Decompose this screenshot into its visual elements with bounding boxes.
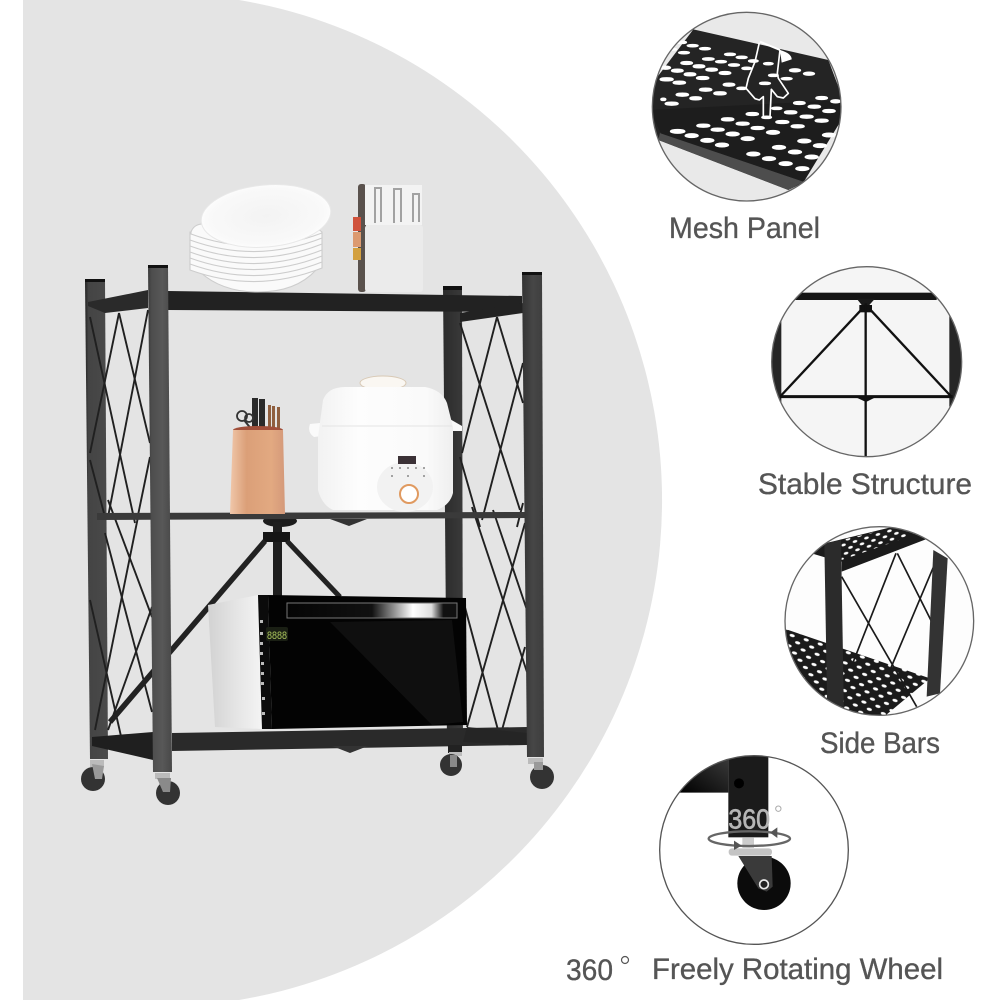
rotation arrows ring <box>709 827 790 850</box>
bottom shelf left wing <box>92 732 153 760</box>
microwave display <box>266 627 288 642</box>
front left post <box>148 266 172 772</box>
detail circle: side bars <box>783 525 977 720</box>
centre back folding brace <box>110 515 340 722</box>
knife block <box>353 184 423 292</box>
top bowl <box>199 179 333 253</box>
detail circle: stable structure <box>770 265 967 462</box>
wheel fork <box>729 837 772 856</box>
microwave button column <box>260 620 265 715</box>
microwave handle <box>287 603 457 618</box>
folding shelf rack <box>81 265 554 805</box>
label: 360 degrees: 360 <box>566 954 613 987</box>
detail circle: rotating wheel <box>657 753 853 950</box>
post caps <box>85 265 542 290</box>
microwave oven <box>208 595 467 729</box>
top shelf left wing <box>88 290 148 313</box>
microwave display: 8888 <box>267 630 287 642</box>
label: Stable Structure: Stable Structure <box>758 468 972 501</box>
rice cooker <box>309 376 462 512</box>
back right post <box>443 287 463 745</box>
plate stack <box>190 179 333 292</box>
top shelf <box>168 291 522 312</box>
pointing hand icon <box>746 42 792 117</box>
front right post <box>522 273 544 757</box>
utensil cup <box>230 398 285 514</box>
middle shelf bracket <box>330 519 367 526</box>
top shelf right wing <box>460 303 523 322</box>
caster wheel back left <box>81 760 105 791</box>
middle shelf <box>97 512 527 520</box>
label: Freely Rotating Wheel: Freely Rotating Wheel <box>652 953 943 986</box>
right side cross wires <box>460 317 527 730</box>
black wheel <box>737 857 791 910</box>
360 overlay text: 360 <box>728 803 770 834</box>
back left post <box>85 280 108 759</box>
detail circle: mesh panel <box>650 10 843 203</box>
left side cross wires <box>90 310 152 745</box>
caster wheel back right <box>440 745 462 776</box>
label: Mesh Panel: Mesh Panel <box>669 212 820 245</box>
bottom shelf <box>172 727 527 751</box>
bottom shelf right wing <box>463 727 527 745</box>
caster wheel front right <box>528 758 554 789</box>
background grey circle <box>23 0 662 1000</box>
small degree mark <box>776 806 781 811</box>
bottom shelf bracket <box>332 746 368 753</box>
caster wheel front left <box>155 773 180 805</box>
label: Side Bars: Side Bars <box>820 727 940 760</box>
cooker control panel <box>377 456 433 512</box>
